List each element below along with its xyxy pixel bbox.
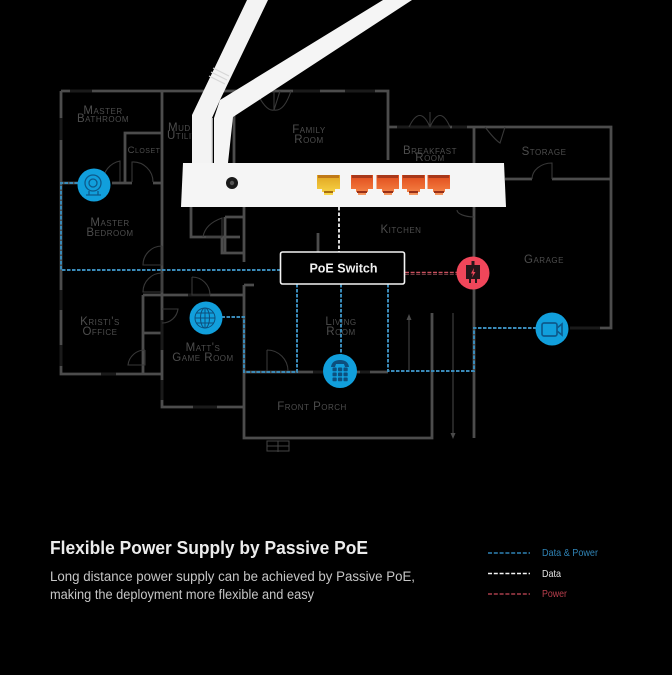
red power line: [405, 272, 457, 274]
room labels: Kristi's: [80, 316, 120, 328]
floor plan: [61, 91, 611, 452]
blue data and power lines: [61, 183, 536, 372]
icon: webcam: [78, 168, 110, 202]
WAN port: [317, 175, 340, 195]
porch steps: [267, 441, 289, 452]
description: [50, 569, 415, 602]
icon: power plug: [456, 256, 490, 290]
room labels: Matt's: [186, 342, 220, 354]
room labels: Closet: [128, 145, 161, 156]
router body: [181, 163, 506, 207]
LAN port 2: [376, 175, 399, 195]
room labels: Master: [83, 105, 123, 117]
room labels: Storage: [522, 146, 566, 158]
room labels: Garage: [524, 254, 564, 266]
router: [181, 0, 506, 207]
LAN port 3: [402, 175, 425, 195]
room labels: Master: [90, 217, 130, 229]
room labels: Mud: [168, 122, 191, 134]
legend: data: Data: [542, 568, 561, 580]
icon: video camera: [536, 312, 568, 346]
LAN port 1: [351, 175, 373, 195]
room labels: [77, 105, 566, 413]
LAN port 4: [428, 175, 450, 195]
room labels: Bedroom: [86, 227, 134, 239]
room labels: Room: [326, 326, 356, 338]
antenna right: [212, 0, 412, 163]
icon: globe: [190, 302, 222, 334]
antenna left: [192, 0, 268, 163]
PoE Switch box: [280, 252, 404, 284]
room labels: Front Porch: [277, 401, 347, 413]
room labels: Breakfast: [403, 145, 457, 157]
icon: telephone: [323, 354, 357, 388]
room labels: Game Room: [172, 352, 234, 364]
room labels: Kitchen: [381, 224, 421, 236]
room labels: Family: [292, 124, 326, 136]
white data line: [338, 207, 340, 252]
room labels: Bathroom: [77, 113, 129, 125]
legend: data and power: Data & Power: [542, 547, 598, 559]
arrow: down: [450, 313, 456, 439]
description: Long distance power supply can be achieved by Passive PoE,: [50, 569, 415, 584]
heading: Flexible Power Supply by Passive PoE: [50, 538, 368, 558]
room labels: Room: [294, 134, 324, 146]
power socket: [226, 177, 238, 189]
description: making the deployment more flexible and easy: [50, 587, 314, 602]
arrow: up: [406, 314, 412, 372]
room labels: Room: [415, 152, 445, 164]
room labels: Living: [325, 316, 357, 328]
room labels: Utility: [167, 130, 203, 142]
legend: [488, 547, 598, 600]
PoE Switch box: PoE Switch: [309, 262, 378, 276]
legend: power: Power: [542, 588, 567, 600]
room labels: Office: [82, 326, 118, 338]
